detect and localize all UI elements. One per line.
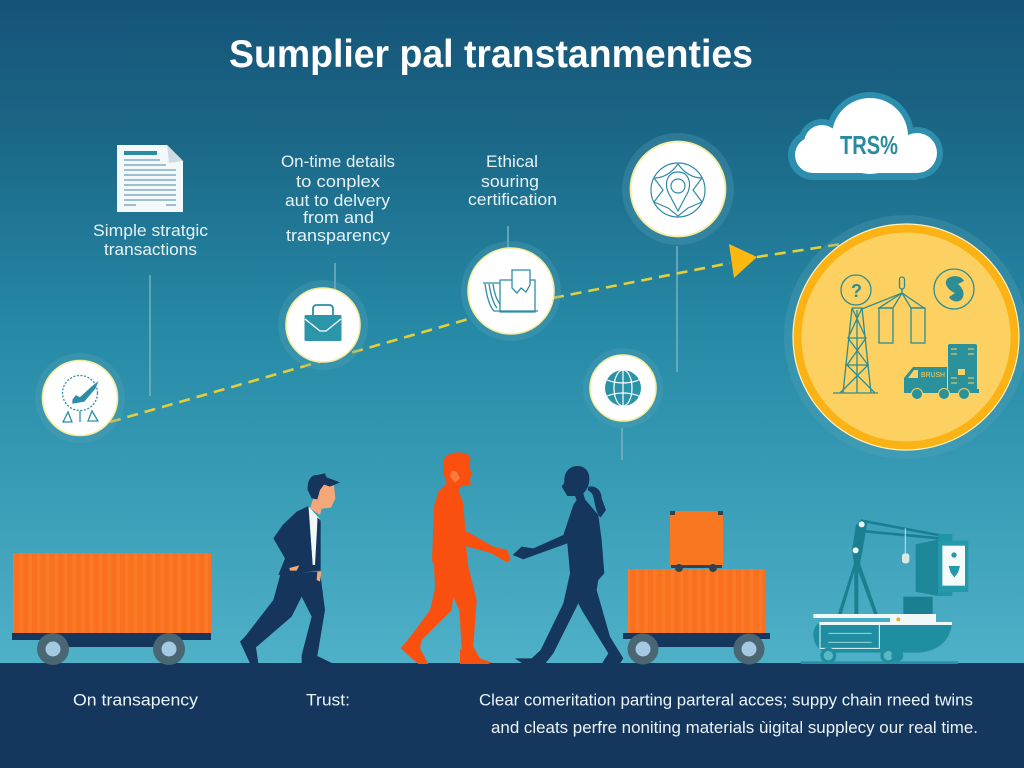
silhouette woman (513, 466, 623, 664)
footer text: description (479, 690, 978, 737)
cloud with TRS%: TRS% (840, 130, 898, 160)
left orange container on trailer (12, 553, 211, 665)
icon: document folder (461, 241, 561, 341)
label: ethical sourcing certification: souring (481, 172, 539, 191)
footer band (0, 663, 1024, 768)
icon: delivery truck: BRUSH (921, 372, 945, 379)
label: on-time details: from and (303, 208, 374, 227)
label: simple strategic transactions: transactions (104, 240, 197, 259)
right stacked containers on trailer (623, 511, 770, 664)
label: on-time details: aut to delvery (285, 191, 391, 210)
document icon (117, 145, 183, 212)
label: on-time details: to conplex (296, 172, 381, 191)
boat with crane (801, 519, 968, 664)
title: Sumplier pal transtanmenties (229, 33, 753, 76)
businessman in suit (240, 473, 340, 663)
label: ethical sourcing certification: certification (468, 190, 557, 209)
icon: delivery truck (904, 344, 979, 400)
icon: compass shield (622, 133, 734, 245)
arrow head (729, 244, 757, 278)
label: on-time details: On-time details (281, 152, 395, 171)
footer text: description: Clear comeritation parting parteral acces; suppy chain rneed twins (479, 690, 973, 710)
footer text: description: and cleats perfre noniting materials ùigital supplecy our real time. (491, 718, 978, 737)
big yellow circle (784, 215, 1024, 459)
label: ethical sourcing certification: Ethical (486, 152, 538, 171)
icon: award badge (35, 353, 125, 443)
label: simple strategic transactions (93, 221, 209, 259)
icon: briefcase (278, 280, 368, 370)
dashed trend line (110, 243, 848, 422)
connector lines (150, 226, 677, 460)
label: on-time details (281, 152, 395, 245)
footer text: on transparency: On transapency (73, 690, 199, 710)
icon: globe (583, 348, 663, 428)
label: ethical sourcing certification (468, 152, 557, 209)
label: on-time details: transparency (286, 226, 391, 245)
label: simple strategic transactions: Simple stratgic (93, 221, 209, 240)
icon: transmission tower and crane: ? (851, 281, 862, 301)
orange person (401, 452, 511, 664)
icon: transmission tower and crane (833, 275, 925, 393)
crane arm (838, 519, 943, 614)
icon: globe coin (934, 269, 974, 309)
small top container (670, 511, 723, 572)
cloud with TRS% (788, 92, 943, 180)
footer text: trust: Trust: (306, 690, 350, 710)
hanging screen (916, 534, 968, 596)
